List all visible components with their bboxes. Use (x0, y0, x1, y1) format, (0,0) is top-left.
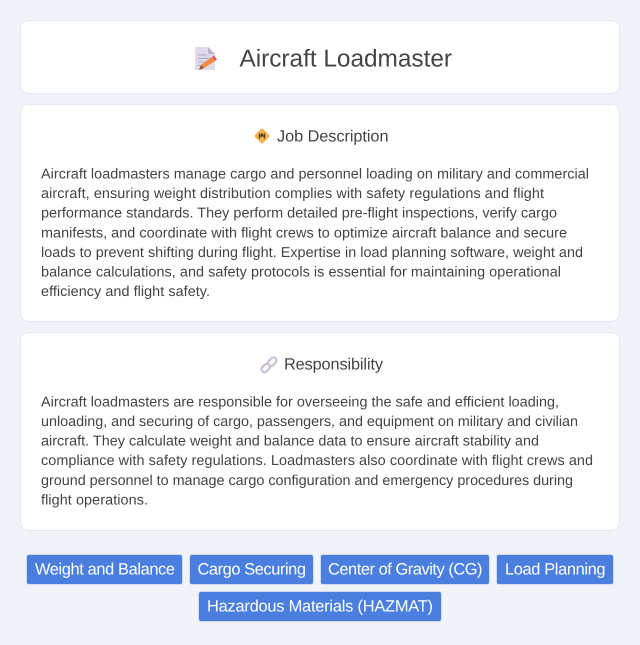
text block: job description: loads to prevent shifting during flight. Expertise in load planning software, weight and (41, 245, 583, 261)
text block: responsibility: unloading, and securing of cargo, passengers, and equipment on military and civilian (41, 414, 578, 430)
tag: hazardous materials: Hazardous Materials (HAZMAT) (207, 598, 433, 616)
tag: load planning (496, 554, 614, 584)
text block: job description (41, 166, 589, 300)
title: Aircraft Loadmaster (240, 46, 452, 72)
tag: weight and balance: Weight and Balance (35, 560, 175, 578)
tag: weight and balance (26, 554, 182, 584)
text block: responsibility: compliance with safety regulations. Loadmasters also coordinate with flight crews and (41, 453, 593, 469)
text block: job description: Aircraft loadmasters manage cargo and personnel loading on military and commercial (41, 166, 589, 182)
text block: job description: performance standards. They perform detailed pre-flight inspections, verify cargo (41, 206, 557, 222)
heading: job description: Job Description (277, 128, 388, 146)
panel: responsibility (20, 332, 620, 530)
icon: document with pencil (195, 47, 217, 70)
tag: hazardous materials (198, 592, 442, 622)
tag: load planning: Load Planning (505, 560, 606, 578)
icon: chain link (260, 356, 278, 373)
text block: responsibility: aircraft. They calculate weight and balance data to ensure aircraft stability and (41, 434, 539, 450)
text block: job description: manifests, and coordinate with flight crews to optimize aircraft balance and secure (41, 225, 567, 241)
panel: title card (20, 20, 620, 94)
tag: center of gravity (320, 554, 490, 584)
text block: job description: efficiency and flight safety. (41, 284, 210, 300)
text block: responsibility (41, 394, 593, 508)
tag: center of gravity: Center of Gravity (CG) (328, 560, 482, 578)
text block: job description: aircraft, ensuring weight distribution complies with safety regulations and flight (41, 186, 544, 202)
text block: responsibility: flight operations. (41, 492, 148, 508)
text block: responsibility: ground personnel to manage cargo configuration and emergency procedures during (41, 473, 573, 489)
tag: cargo securing (190, 554, 314, 584)
heading: responsibility: Responsibility (284, 356, 384, 374)
panel: job description (20, 104, 620, 322)
tag: cargo securing: Cargo Securing (198, 560, 306, 578)
icon: orange diamond sign (254, 128, 270, 144)
text block: job description: balance calculations, and safety protocols is essential for maintaining operational (41, 264, 561, 280)
text block: responsibility: Aircraft loadmasters are responsible for overseeing the safe and efficient loading, (41, 394, 559, 410)
